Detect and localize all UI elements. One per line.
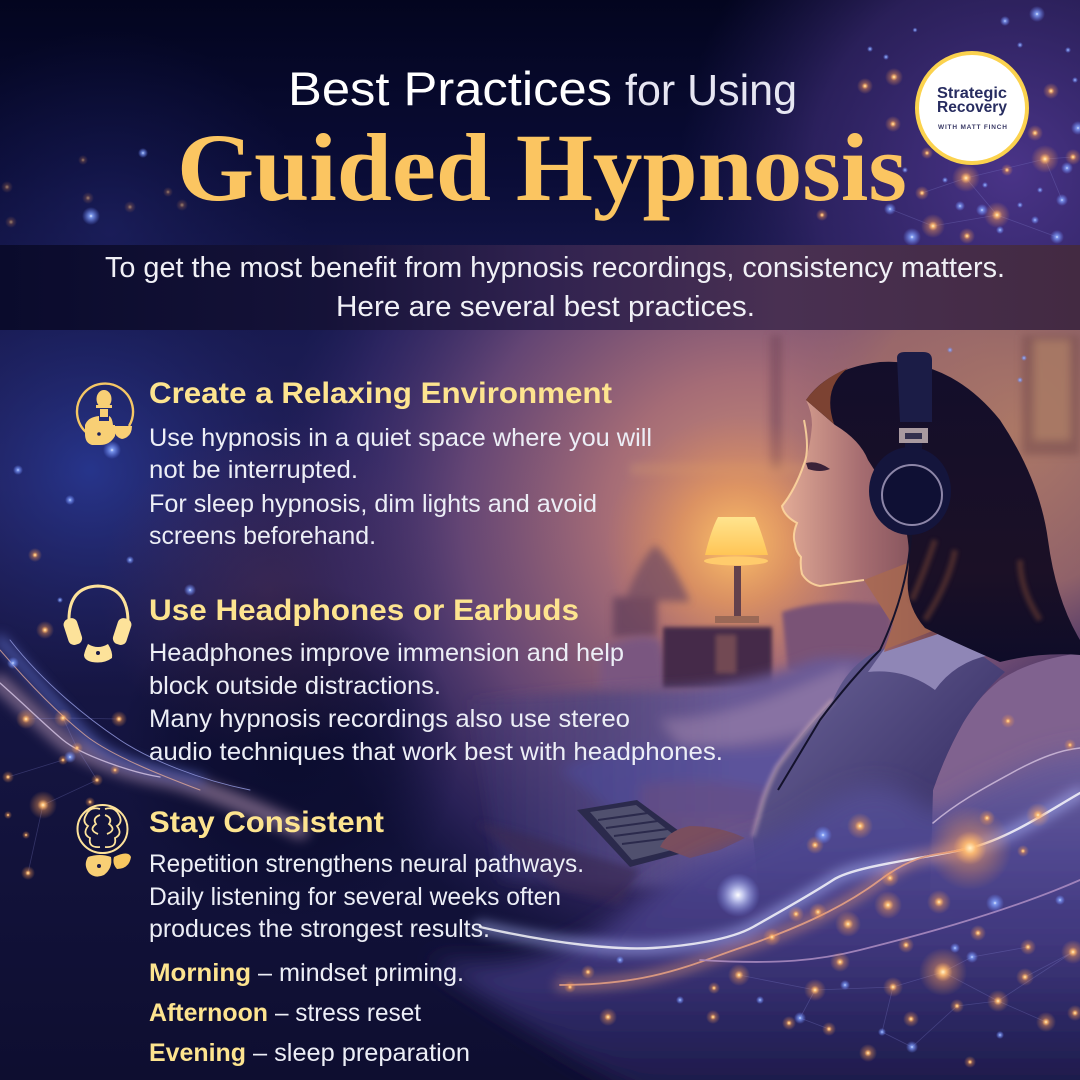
nightstand bbox=[663, 627, 772, 688]
section: stay consistent bbox=[78, 805, 584, 1067]
logo badge: WITH MATT FINCH bbox=[938, 124, 1007, 131]
title bbox=[177, 62, 907, 221]
blanket bbox=[470, 658, 880, 900]
body bbox=[149, 639, 723, 766]
intro text bbox=[105, 252, 1005, 323]
heading: Use Headphones or Earbuds bbox=[149, 594, 579, 627]
title: first line: Best Practices bbox=[288, 62, 612, 115]
small pillow bbox=[600, 637, 667, 690]
icon: headphones bbox=[62, 586, 133, 662]
woman: torso bbox=[753, 640, 1005, 900]
woman: hand bbox=[660, 826, 745, 858]
back pillow bbox=[925, 653, 1080, 900]
body: screens beforehand. bbox=[149, 522, 376, 550]
routine: morning: Morning bbox=[149, 959, 251, 987]
section: create a relaxing environment bbox=[77, 377, 652, 550]
routine: morning: – mindset priming. bbox=[258, 959, 464, 987]
tablet keyboard bbox=[577, 800, 702, 867]
intro text: Here are several best practices. bbox=[336, 291, 755, 323]
body: Daily listening for several weeks often bbox=[149, 883, 561, 911]
logo badge bbox=[917, 53, 1027, 163]
body: block outside distractions. bbox=[149, 672, 441, 700]
body bbox=[149, 424, 652, 550]
routine: evening: Evening bbox=[149, 1039, 246, 1067]
light veil over bed bbox=[430, 745, 1080, 1080]
heading: Stay Consistent bbox=[149, 806, 384, 839]
intro text: To get the most benefit from hypnosis recordings, consistency matters. bbox=[105, 252, 1005, 284]
intro band bbox=[0, 245, 1080, 330]
routine: afternoon: Afternoon bbox=[149, 999, 268, 1027]
illustration: bedroom scene bbox=[470, 335, 1080, 905]
body: produces the strongest results. bbox=[149, 915, 490, 943]
body: Repetition strengthens neural pathways. bbox=[149, 850, 584, 878]
headphones bbox=[869, 352, 951, 535]
headphone cable bbox=[778, 535, 911, 790]
lamp bbox=[704, 517, 768, 623]
routine: evening bbox=[149, 1039, 470, 1067]
body: Use hypnosis in a quiet space where you will bbox=[149, 424, 652, 452]
body bbox=[149, 850, 584, 943]
pillow behind bbox=[782, 602, 892, 673]
icon: person in circle bbox=[77, 384, 133, 445]
icon: brain bbox=[78, 805, 131, 877]
routine: afternoon bbox=[149, 999, 421, 1027]
logo badge: Recovery bbox=[937, 99, 1007, 116]
bedside plant bbox=[613, 545, 690, 637]
routine: morning bbox=[149, 959, 464, 987]
woman: hair bbox=[806, 362, 1080, 662]
body: not be interrupted. bbox=[149, 456, 358, 484]
body: For sleep hypnosis, dim lights and avoid bbox=[149, 490, 597, 518]
heading: Create a Relaxing Environment bbox=[149, 377, 612, 410]
woman: neck and face bbox=[782, 380, 960, 652]
section: use headphones or earbuds bbox=[62, 586, 723, 766]
routine: evening: – sleep preparation bbox=[253, 1039, 470, 1067]
title: guided hypnosis: Guided Hypnosis bbox=[177, 114, 907, 221]
forearm bbox=[477, 823, 640, 905]
body: Many hypnosis recordings also use stereo bbox=[149, 705, 630, 733]
body: audio techniques that work best with headphones. bbox=[149, 738, 723, 766]
routine: afternoon: – stress reset bbox=[275, 999, 421, 1027]
title: for using: for Using bbox=[625, 66, 797, 115]
logo badge: Strategic bbox=[937, 85, 1007, 102]
body: Headphones improve immension and help bbox=[149, 639, 624, 667]
